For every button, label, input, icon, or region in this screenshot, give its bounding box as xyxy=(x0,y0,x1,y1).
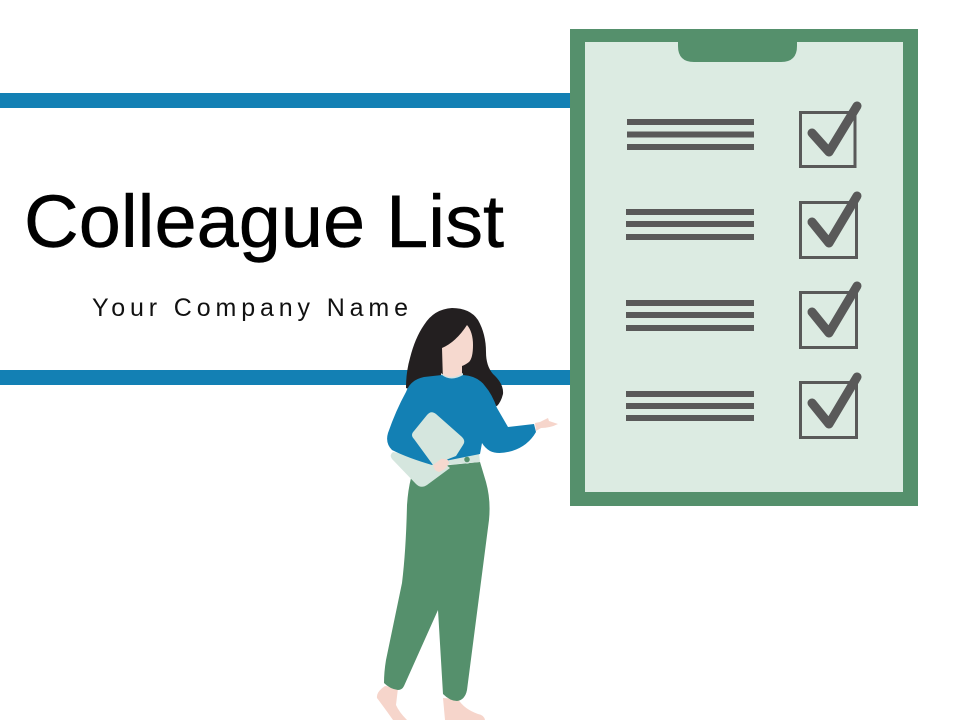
clipboard board xyxy=(570,29,918,506)
belt buckle xyxy=(464,456,470,463)
top blue bar xyxy=(0,93,572,108)
bottom blue bar xyxy=(0,370,572,385)
belt xyxy=(446,453,480,465)
raised hand xyxy=(535,418,558,431)
checklist row 1 xyxy=(627,106,857,166)
face and neck xyxy=(442,325,473,382)
hand holding tablet xyxy=(433,459,449,472)
tablet back xyxy=(391,452,450,487)
title: Colleague List xyxy=(24,180,504,263)
checklist row 3 xyxy=(626,286,857,348)
clipboard xyxy=(570,29,918,506)
woman figure xyxy=(377,308,558,720)
hair xyxy=(406,308,503,406)
tablet front xyxy=(412,412,464,465)
sweater xyxy=(387,375,536,465)
collar xyxy=(441,373,463,382)
clipboard paper xyxy=(585,42,903,492)
subtitle: Your Company Name xyxy=(92,294,408,322)
checklist row 2 xyxy=(626,196,857,258)
clipboard clip xyxy=(678,41,797,62)
checklist row 4 xyxy=(626,377,857,438)
pants xyxy=(384,462,490,701)
feet xyxy=(377,686,485,720)
